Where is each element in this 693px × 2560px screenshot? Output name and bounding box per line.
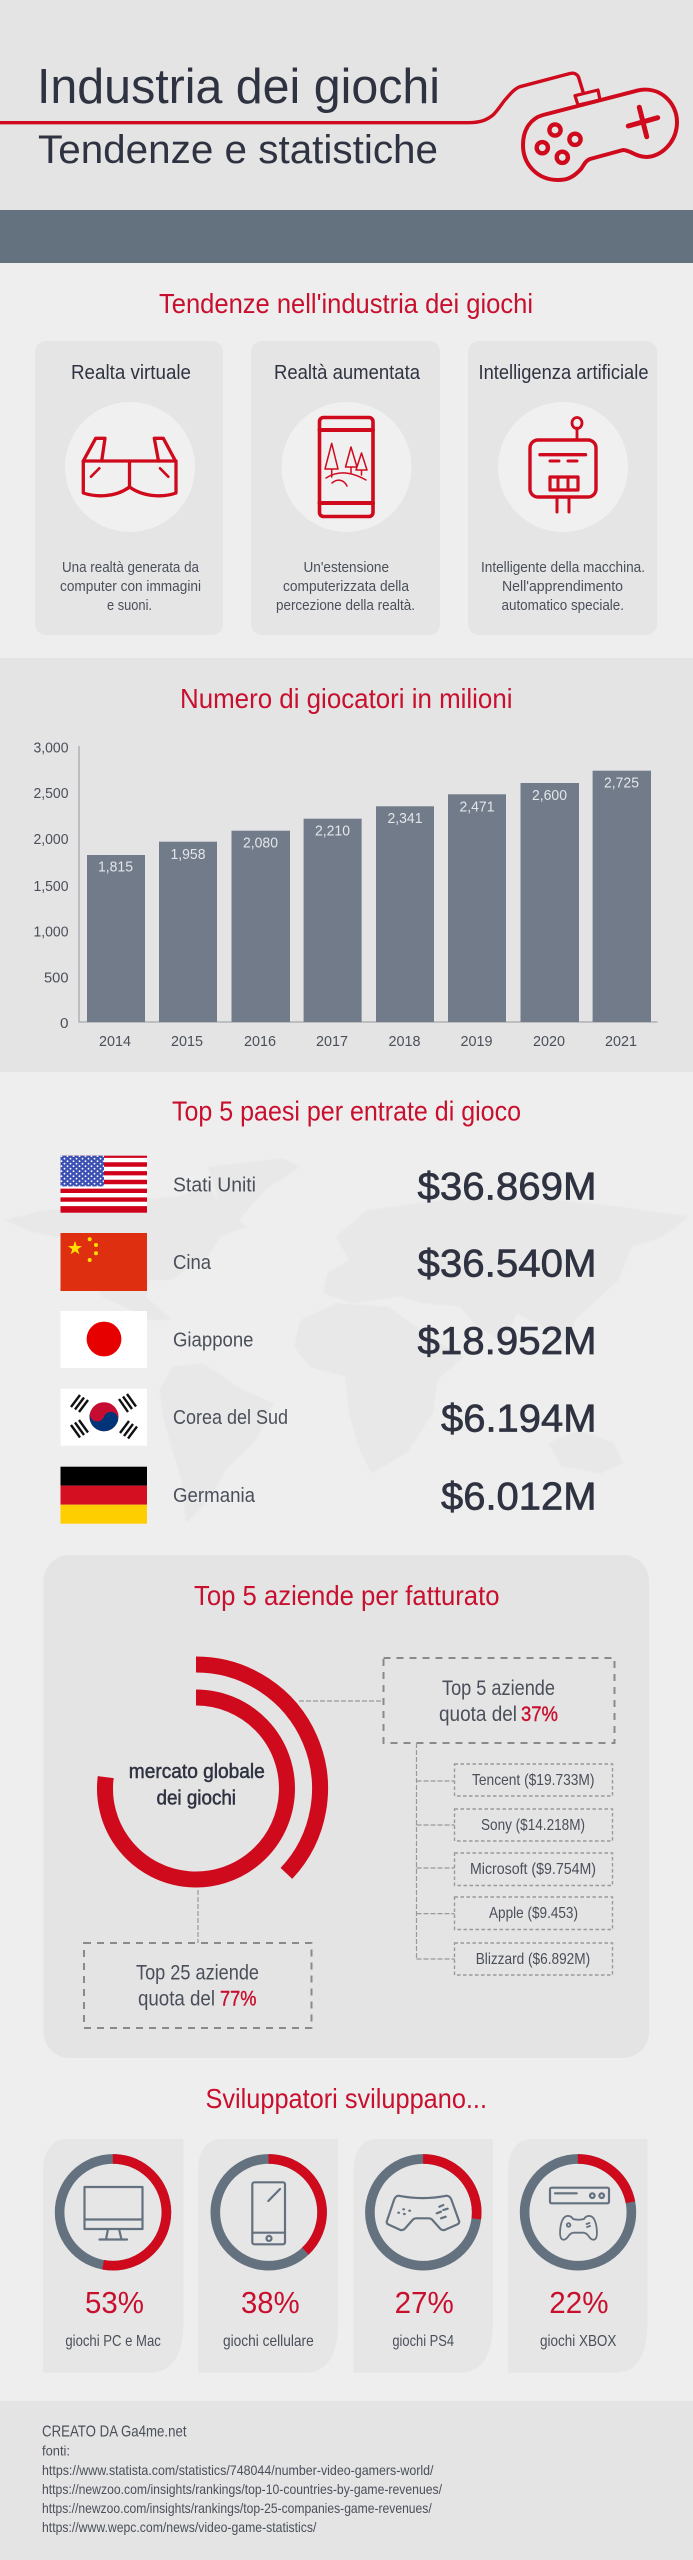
ring centre label: dei giochi [156,1787,236,1809]
bar chart: 500 [44,971,68,987]
card: mobile [198,2139,338,2373]
bar chart: 2,500 [34,786,68,802]
callout: top 25 share: Top 25 aziende [136,1962,259,1984]
header [0,0,693,210]
icon: AR phone [320,418,373,516]
bar chart: 2017 [316,1034,348,1050]
callout: top 5 share: quota del [439,1703,517,1726]
title: Industria dei giochi [37,60,440,114]
bar chart: 2,341 [388,811,422,827]
bar chart: 2018 [388,1034,420,1050]
card: virtual reality: Una realtà generata da [62,560,200,576]
card: mobile: 38% [241,2285,300,2320]
bar chart: 2,471 [460,800,494,816]
flag: Germany [60,1467,147,1524]
company list: Blizzard ($6.892M) [476,1951,590,1968]
bar chart [34,741,658,1050]
heading: developers: Sviluppatori sviluppano... [206,2083,487,2114]
company list: Apple ($9.453) [489,1905,578,1922]
card: augmented reality [251,341,440,635]
ring chart: 37% and 77% [105,1664,320,1880]
bar chart: 1,500 [34,879,68,895]
heading: trends: Tendenze nell'industria dei giochi [159,288,533,319]
card: PC and Mac: 53% [85,2285,144,2320]
card: XBOX: giochi XBOX [540,2333,617,2350]
country revenues: $36.540M [418,1243,596,1286]
icon: console and pad [550,2188,609,2240]
country list labels: Germania [173,1485,256,1507]
flag: China [60,1233,147,1291]
flag: South Korea [60,1389,147,1446]
bar chart: 1,000 [34,925,68,941]
footer: credits and sources: fonti: [42,2443,70,2459]
footer: credits and sources: https://www.wepc.com/news/video-game-statistics/ [42,2519,316,2535]
section: trends [35,288,657,635]
card: PC and Mac [43,2139,183,2373]
bar chart: 2014 [99,1034,131,1050]
section: developers [43,2083,647,2373]
bar chart: 3,000 [34,741,68,757]
country revenues: $6.194M [441,1398,596,1441]
company list: Microsoft ($9.754M) [470,1861,596,1878]
bar chart: 0 [60,1016,68,1032]
icon: robot [530,418,596,512]
flag: Japan [60,1311,147,1368]
card: augmented reality: Un'estensione [304,560,389,576]
card: augmented reality: Realtà aumentata [274,362,421,384]
bar chart: 2,080 [243,836,278,852]
footer: credits and sources: https://newzoo.com/insights/rankings/top-10-countries-by-game-revenues/ [42,2481,442,2497]
card: PS4 [354,2139,493,2373]
card: artificial intelligence: Intelligenza artificiale [478,362,648,384]
bar chart: 2015 [171,1034,203,1050]
card: XBOX: 22% [549,2285,608,2320]
company list: Sony ($14.218M) [481,1817,585,1834]
heading: players: Numero di giocatori in milioni [180,683,512,714]
bar chart: 1,815 [98,860,133,876]
callout: top 25 share: 77% [220,1988,256,2010]
company list [454,1764,612,1975]
card: artificial intelligence: Nell'apprendimento [502,579,623,595]
footer: credits and sources [0,2401,693,2560]
card: augmented reality: computerizzata della [283,579,410,595]
panel: top companies [44,1555,649,2058]
card: XBOX [508,2139,647,2373]
bar chart: 2016 [244,1034,276,1050]
ring centre label: mercato globale [129,1761,265,1783]
bar chart: 2,210 [315,824,350,840]
callout: top 5 share [299,1658,614,1743]
card: virtual reality: computer con immagini [60,579,201,595]
footer: credits and sources: https://www.statista.com/statistics/748044/number-video-gamers-world/ [42,2462,434,2478]
country revenues [418,1165,596,1518]
heading: top companies: Top 5 aziende per fatturato [194,1580,500,1611]
country revenues: $36.869M [418,1165,596,1208]
country list labels: Stati Uniti [173,1175,256,1197]
world map background [4,1158,690,1523]
banner band [0,210,693,263]
bar chart: 2020 [533,1034,565,1050]
ring centre label [129,1761,265,1809]
card: PS4: giochi PS4 [392,2333,454,2350]
country list labels [173,1175,288,1507]
card: artificial intelligence: Intelligente della macchina. [481,560,645,576]
bar chart: 2,725 [604,776,639,792]
section: players chart [0,658,693,1072]
icon: game controller with cable [0,73,677,180]
icon: monitor [84,2187,142,2240]
tree connectors [416,1743,454,1959]
heading: top countries: Top 5 paesi per entrate di gioco [172,1096,521,1127]
country list labels: Corea del Sud [173,1407,288,1429]
card: augmented reality: percezione della realtà. [276,598,415,614]
footer: credits and sources: CREATO DA Ga4me.net [42,2424,187,2441]
icon: VR glasses [83,438,176,496]
card: virtual reality: Realta virtuale [71,362,191,384]
icon: gamepad [387,2196,459,2230]
flag: USA [60,1156,147,1213]
country list labels: Cina [173,1252,212,1274]
card: artificial intelligence: automatico speciale. [502,598,624,614]
card: PS4: 27% [395,2285,454,2320]
callout: top 5 share: Top 5 aziende [442,1677,555,1700]
card: virtual reality [35,341,223,635]
card: artificial intelligence [468,341,657,635]
footer: credits and sources: https://newzoo.com/insights/rankings/top-25-companies-game-revenues/ [42,2500,432,2516]
section: top countries [4,1096,690,1524]
bar chart: 2,000 [34,832,68,848]
callout: top 5 share: 37% [521,1703,558,1726]
company list: Tencent ($19.733M) [472,1772,594,1789]
country revenues: $18.952M [418,1320,596,1363]
icon: smartphone [252,2182,285,2244]
bar chart: 2019 [460,1034,492,1050]
country revenues: $6.012M [441,1475,596,1518]
card: PC and Mac: giochi PC e Mac [65,2333,161,2350]
card: mobile: giochi cellulare [223,2333,314,2350]
bar chart: 2021 [605,1034,637,1050]
card: virtual reality: e suoni. [107,598,152,614]
callout: top 25 share: quota del [138,1988,215,2010]
country list labels: Giappone [173,1330,254,1352]
callout: top 25 share [84,1890,312,2028]
subtitle: Tendenze e statistiche [38,128,438,172]
bar chart: 2,600 [532,788,567,804]
bar chart: 1,958 [170,847,206,863]
